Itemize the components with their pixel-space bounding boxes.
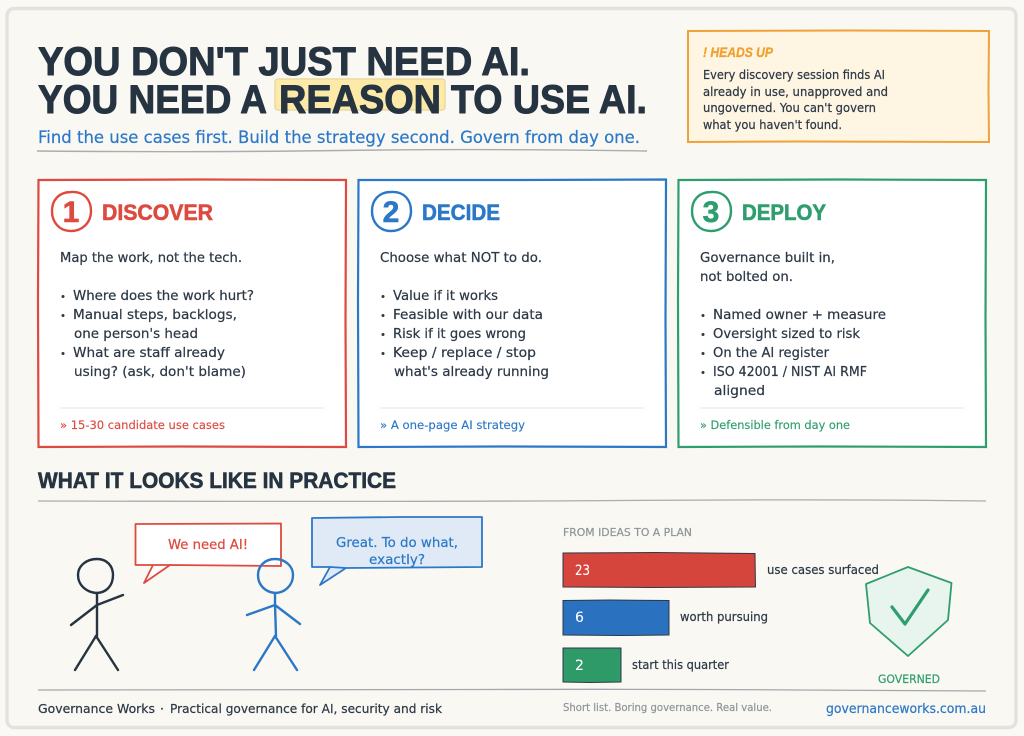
chart heading: FROM IDEAS TO A PLAN (563, 526, 692, 539)
callout body: what you haven't found. (703, 118, 842, 132)
bullet list: Manual steps, backlogs, (73, 308, 237, 323)
footer brand (38, 701, 443, 716)
number badge 3: 3 (703, 196, 719, 229)
footer brand: Governance Works (38, 701, 155, 716)
card outcome: » Defensible from day one (700, 418, 850, 432)
footer brand: Practical governance for AI, security and risk (170, 701, 443, 716)
title line 2 (38, 78, 647, 122)
card heading: DEPLOY (742, 200, 826, 225)
panel: deploy (678, 180, 986, 447)
bullet list: what's already running (394, 365, 549, 380)
title (38, 40, 647, 122)
footer link: governanceworks.com.au (826, 702, 986, 717)
bullet list: On the AI register (713, 346, 830, 361)
shield label: GOVERNED (878, 672, 940, 686)
callout: heads up (688, 30, 989, 142)
bullet list: What are staff already (73, 346, 225, 361)
bullet list: Oversight sized to risk (713, 327, 860, 342)
bullet list: one person's head (74, 327, 198, 342)
speech bubble: to do what: exactly? (369, 553, 425, 568)
card lead: Choose what NOT to do. (380, 251, 542, 266)
bar: 23 use cases: use cases surfaced (767, 563, 879, 577)
callout body: ungoverned. You can't govern (703, 101, 876, 115)
section heading: WHAT IT LOOKS LIKE IN PRACTICE (38, 468, 396, 493)
number badge 2: 2 (383, 196, 399, 229)
bar: 23 use cases: 23 (575, 563, 590, 579)
number badge 1: 1 (63, 196, 79, 229)
bullet list (382, 289, 549, 380)
subtitle: Find the use cases first. Build the strategy second. Govern from day one. (38, 128, 640, 148)
highlight: reason (275, 79, 445, 110)
number badge 3 (692, 192, 731, 231)
bar chart: from ideas to a plan (563, 526, 879, 682)
speech bubble: to do what: Great. To do what, (336, 536, 458, 551)
card lead: Map the work, not the tech. (60, 251, 242, 266)
callout body (703, 68, 888, 132)
bullet list: using? (ask, don't blame) (74, 365, 246, 380)
bullet list: Value if it works (393, 289, 498, 304)
bar: 2 start this quarter: start this quarter (632, 658, 729, 672)
bar: 6 worth pursuing: 6 (575, 610, 584, 626)
card heading: DECIDE (422, 200, 500, 225)
card outcome: » A one-page AI strategy (380, 418, 525, 432)
bullet list: Keep / replace / stop (393, 346, 536, 361)
card lead: Governance built in, (700, 251, 835, 266)
card lead: not bolted on. (700, 270, 793, 285)
bullet list: Where does the work hurt? (73, 289, 254, 304)
number badge 2 (372, 192, 411, 231)
speech bubble: we need AI (136, 524, 281, 583)
callout body: Every discovery session finds AI (703, 68, 885, 82)
bar: 6 worth pursuing: worth pursuing (680, 610, 768, 624)
footer brand: · (160, 701, 164, 716)
title line 2: REASON (279, 78, 441, 122)
card outcome: » 15-30 candidate use cases (60, 418, 225, 432)
bullet list (62, 289, 254, 380)
title line 2: TO USE AI. (451, 78, 647, 122)
speech bubble: to do what (312, 517, 482, 585)
bullet list: Feasible with our data (393, 308, 543, 323)
bar: 2 start this quarter: 2 (575, 658, 584, 674)
bar: 6 worth pursuing (563, 600, 768, 636)
stick figure: responder (247, 559, 300, 670)
card heading: DISCOVER (102, 200, 213, 225)
number badge 1 (52, 192, 91, 231)
bar: 2 start this quarter (563, 648, 729, 682)
bullet list: Named owner + measure (713, 308, 886, 323)
callout heading: ! HEADS UP (703, 44, 774, 60)
footer (38, 701, 986, 717)
footer tagline: Short list. Boring governance. Real value. (563, 701, 772, 714)
bar: 23 use cases (563, 552, 879, 588)
callout body: already in use, unapproved and (703, 85, 888, 99)
title line 2: YOU NEED A (38, 78, 267, 122)
bullet list: ISO 42001 / NIST AI RMF (713, 365, 867, 380)
title line 1: YOU DON'T JUST NEED AI. (38, 40, 530, 84)
bullet list: Risk if it goes wrong (393, 327, 526, 342)
bullet list: aligned (714, 384, 765, 399)
panel: discover (38, 180, 346, 447)
card lead (700, 251, 835, 285)
panel: decide (358, 180, 666, 447)
speech bubble: we need AI: We need AI! (168, 538, 248, 553)
icon: governed shield (866, 567, 952, 686)
bullet list (702, 308, 886, 399)
stick figure: asker (71, 559, 123, 670)
